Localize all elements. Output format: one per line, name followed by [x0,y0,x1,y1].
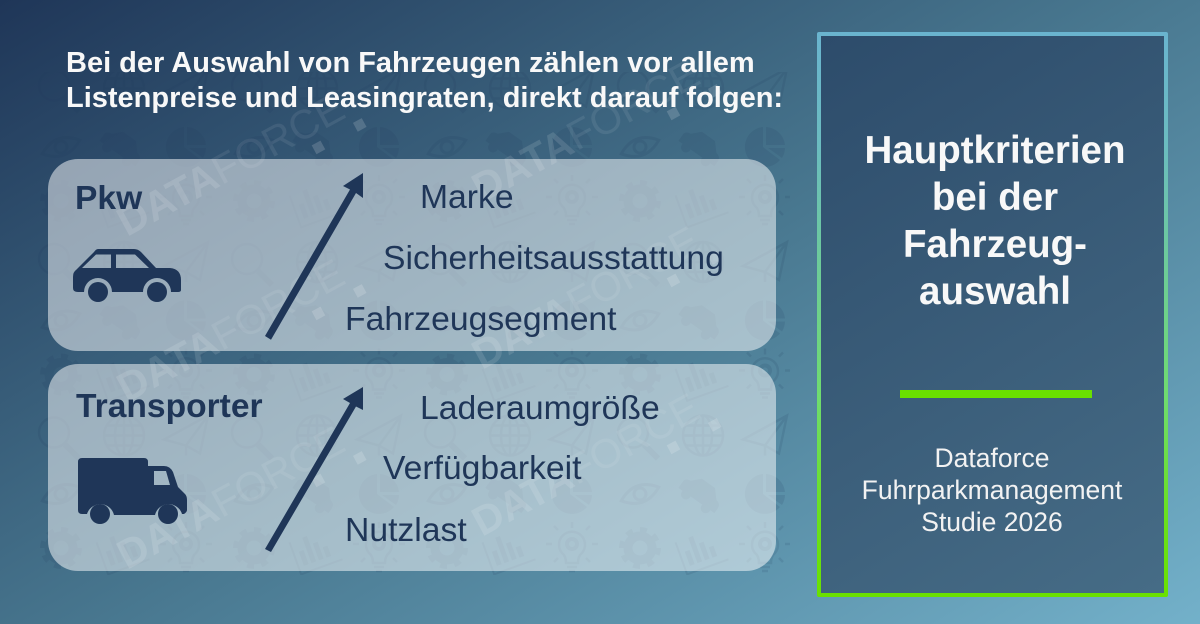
panel: Pkw [48,159,776,351]
DATAFORCE watermarks [109,45,722,586]
DATAFORCE watermarks: DATAFORCE [464,50,707,211]
summary heading: bei der [932,176,1058,219]
DATAFORCE watermarks: DATAFORCE [109,417,352,578]
DATAFORCE watermarks: DATAFORCE [109,250,352,411]
Transporter criteria list: Verfügbarkeit [383,449,582,487]
study source text: Studie 2026 [921,507,1063,537]
icon: car [73,249,181,302]
summary heading: auswahl [919,270,1071,313]
intro heading [66,47,783,114]
Transporter criteria list: Nutzlast [345,511,467,549]
Pkw label: Pkw [75,180,143,217]
study source text: Dataforce [935,443,1049,473]
Transporter criteria list: Laderaumgröße [420,389,660,427]
Transporter criteria list [345,389,660,549]
Pkw criteria list: Sicherheitsausstattung [383,239,724,277]
Transporter label: Transporter [76,388,263,425]
green divider bar [900,390,1092,398]
arrow: rising Pkw criteria [265,173,363,340]
icon: van [78,458,187,524]
panel: Transporter [48,364,776,571]
Pkw criteria list: Fahrzeugsegment [345,300,617,338]
study source text [862,443,1123,537]
DATAFORCE watermarks: DATAFORCE [464,384,707,545]
DATAFORCE watermarks: DATAFORCE [109,84,352,245]
summary heading [864,129,1126,313]
background icon pattern [30,72,790,575]
Pkw criteria list: Marke [420,178,514,216]
Pkw criteria list [345,178,724,338]
study source text: Fuhrparkmanagement [862,475,1123,505]
intro heading: Listenpreise und Leasingraten, direkt darauf folgen: [66,82,783,114]
arrow: rising Transporter criteria [265,387,363,552]
panel: study summary [819,34,1166,595]
summary heading: Hauptkriterien [864,129,1126,172]
summary heading: Fahrzeug- [903,223,1087,266]
DATAFORCE watermarks: DATAFORCE [464,217,707,378]
intro heading: Bei der Auswahl von Fahrzeugen zählen vor allem [66,47,755,79]
